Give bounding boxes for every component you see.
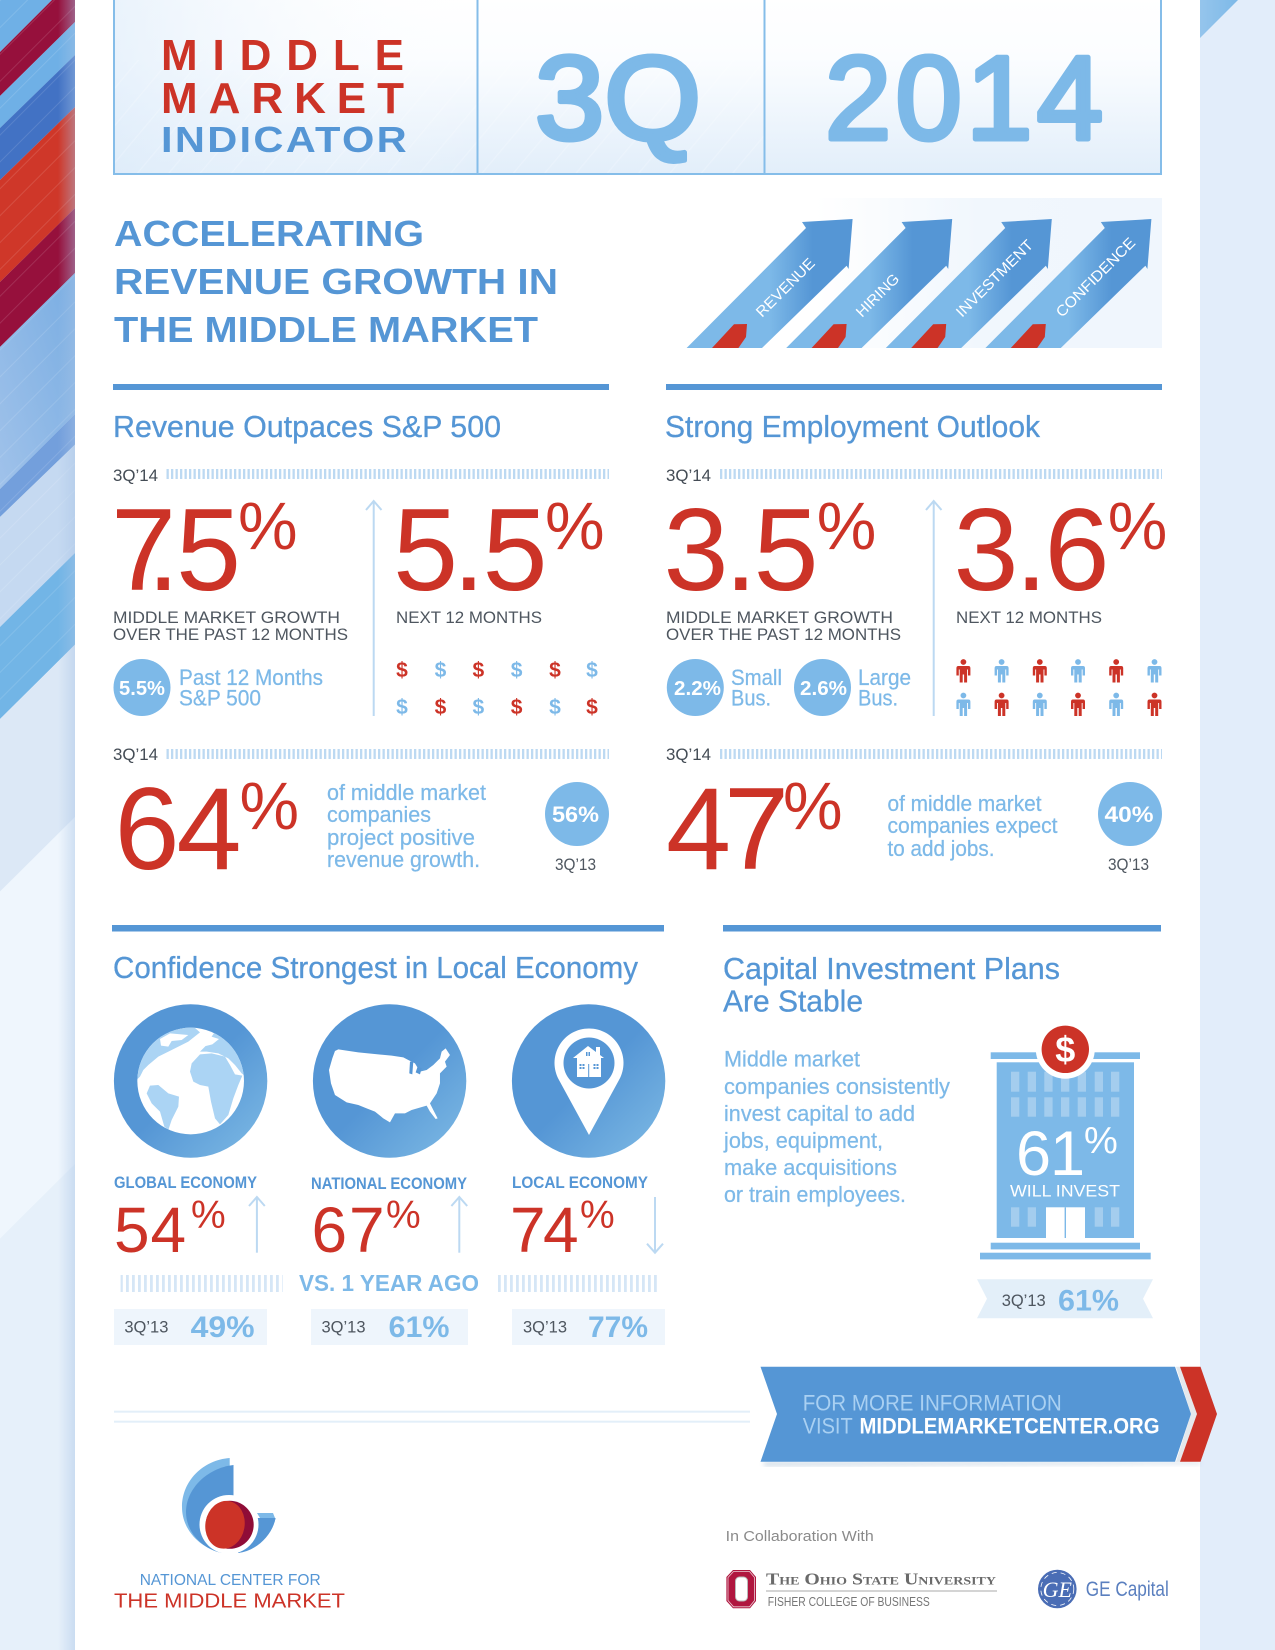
- text: capital investment description: or train employees.: [724, 1182, 906, 1207]
- box: national 3Q13 61%: [311, 1309, 468, 1345]
- box: national 3Q13 61%: 61%: [388, 1311, 450, 1344]
- box: global 3Q13 49%: [114, 1309, 267, 1345]
- heading: employment: Strong Employment Outlook: [665, 409, 1040, 444]
- box: local 3Q13 77%: 3Q’13: [523, 1319, 567, 1337]
- stat: global economy: [114, 1174, 257, 1266]
- year label: 2014: [825, 32, 1103, 165]
- callout: large business 2.6%: [794, 659, 911, 716]
- tick bar: employment 3Q14: [666, 467, 1162, 485]
- stat: 64 percent: [114, 763, 299, 894]
- text: capital investment description: Middle market: [724, 1047, 860, 1072]
- heading: confidence: Confidence Strongest in Local Economy: [113, 950, 638, 985]
- caption: past 12 months: [113, 609, 348, 644]
- icon: building with 61%: WILL INVEST: [1010, 1183, 1120, 1201]
- stat: national economy: 67: [312, 1194, 385, 1266]
- main heading: ACCELERATING: [114, 213, 424, 254]
- arrow: revenue: [687, 219, 853, 348]
- icon: building with 61%: %: [1084, 1120, 1118, 1162]
- ribbon: 3Q13 61%: 3Q’13: [1002, 1292, 1046, 1310]
- stat: 3.6 percent: 3.6: [954, 484, 1110, 615]
- arrow: local down: [647, 1197, 663, 1253]
- icons: dollar signs: $: [473, 696, 485, 719]
- panel: strong employment outlook: [664, 384, 1167, 894]
- title: middle market indicator: MIDDLE: [161, 31, 404, 80]
- stat: 64 percent: 64: [114, 763, 242, 894]
- tick bar: 3Q14 second: 3Q’14: [113, 746, 158, 764]
- arrow: investment: [886, 219, 1052, 348]
- logo: national center for the middle market: [114, 1458, 346, 1612]
- caption: past 12 months: MIDDLE MARKET GROWTH: [113, 609, 340, 627]
- box: local 3Q13 77%: 77%: [588, 1311, 648, 1344]
- panel: confidence strongest in local economy: [112, 925, 665, 1345]
- main heading: THE MIDDLE MARKET: [114, 309, 538, 350]
- stat: national economy: [311, 1175, 467, 1266]
- text: capital investment description: companies consistently: [724, 1074, 950, 1099]
- stat: global economy: %: [191, 1194, 226, 1237]
- ribbon: 3Q13 61%: [977, 1279, 1153, 1318]
- stat: national economy: %: [386, 1194, 421, 1237]
- text: positive revenue growth: of middle market: [327, 780, 486, 805]
- logo: national center for the middle market: THE MIDDLE MARKET: [114, 1589, 346, 1612]
- text: positive revenue growth: [327, 780, 486, 872]
- heading: revenue: Revenue Outpaces S&P 500: [113, 409, 501, 444]
- logo: ohio state university: FISHER COLLEGE OF BUSINESS: [768, 1595, 930, 1609]
- quarter label: 3Q: [535, 32, 701, 165]
- arrow: national up: [451, 1197, 467, 1253]
- tick bar: employment 3Q14 second: 3Q’14: [666, 746, 711, 764]
- box: global 3Q13 49%: 49%: [191, 1311, 255, 1344]
- arrow: revenue: REVENUE: [753, 255, 819, 321]
- main heading: [114, 213, 558, 350]
- box: global 3Q13 49%: 3Q’13: [124, 1319, 168, 1337]
- text: expect to add jobs: [888, 791, 1058, 861]
- banner: more information: MIDDLEMARKETCENTER.ORG: [860, 1413, 1160, 1438]
- stat: 64 percent: %: [240, 769, 299, 844]
- icons: dollar signs: [396, 659, 598, 719]
- arrow: employment up divider: [926, 501, 942, 716]
- right decorative band: [1200, 0, 1275, 1650]
- title: middle market indicator: MARKET: [161, 74, 404, 123]
- heading: capital investment: [723, 951, 1060, 1019]
- callout: large business 2.6%: Bus.: [858, 686, 898, 711]
- stat: 7.5 percent: [111, 484, 298, 615]
- tick bar: employment 3Q14: 3Q’14: [666, 467, 711, 485]
- caption: past 12 months: OVER THE PAST 12 MONTHS: [113, 626, 348, 644]
- icon: united states map: [313, 1004, 466, 1158]
- stat: local economy: 74: [510, 1194, 579, 1266]
- stat: 3.5 percent: %: [817, 489, 876, 564]
- stat: 47 percent: %: [783, 769, 843, 844]
- callout: small business 2.2%: 2.2%: [674, 678, 721, 700]
- caption: next 12 months: NEXT 12 MONTHS: [396, 609, 542, 627]
- logo: GE Capital: GE Capital: [1086, 1578, 1169, 1601]
- stat: 47 percent: [666, 763, 843, 894]
- icon: location pin with house: [512, 1004, 665, 1158]
- callout: small business 2.2%: Bus.: [731, 686, 771, 711]
- text: expect to add jobs: to add jobs.: [888, 836, 994, 861]
- caption: employment past 12 months: [666, 609, 901, 644]
- stat: national economy: NATIONAL ECONOMY: [311, 1175, 467, 1193]
- banner: more information: FOR MORE INFORMATION: [803, 1391, 1062, 1416]
- stat: local economy: %: [580, 1194, 615, 1237]
- arrow: investment: INVESTMENT: [953, 237, 1037, 321]
- text: positive revenue growth: companies: [327, 802, 431, 827]
- banner: more information: VISIT: [803, 1413, 853, 1438]
- stat: global economy: 54: [114, 1194, 186, 1266]
- icon: building with 61%: $: [1055, 1029, 1075, 1070]
- callout: large business 2.6%: Large: [858, 665, 911, 690]
- arrow: confidence: [985, 219, 1151, 348]
- stat: 3.6 percent: %: [1108, 489, 1167, 564]
- heading: capital investment: Capital Investment Plans: [723, 951, 1060, 986]
- callout: S&P 500 5.5%: [114, 659, 323, 716]
- arrow: hiring: [786, 219, 952, 348]
- logo: national center for the middle market: NATIONAL CENTER FOR: [140, 1572, 321, 1589]
- stat: 47 percent: 47: [666, 763, 789, 894]
- stat: 7.5 percent: 7.5: [111, 484, 241, 615]
- title: middle market indicator: INDICATOR: [161, 119, 409, 160]
- stat: local economy: [510, 1174, 648, 1266]
- callout: 56% 3Q13: [545, 782, 609, 874]
- box: national 3Q13 61%: 3Q’13: [322, 1319, 366, 1337]
- ribbon: 3Q13 61%: 61%: [1058, 1285, 1119, 1318]
- logo: ohio state university: The Ohio State University: [766, 1569, 996, 1588]
- callout: 40% 3Q13: [1098, 782, 1162, 874]
- icons: dollar signs: $: [549, 696, 561, 719]
- icons: dollar signs: $: [396, 696, 408, 719]
- stat: global economy: GLOBAL ECONOMY: [114, 1174, 257, 1192]
- icons: dollar signs: $: [511, 696, 523, 719]
- logo: GE Capital: GE: [1043, 1577, 1073, 1602]
- text: capital investment description: invest capital to add: [724, 1101, 915, 1126]
- text: capital investment description: jobs, equipment,: [723, 1128, 883, 1153]
- icons: people: [956, 659, 1162, 716]
- arrow: confidence: CONFIDENCE: [1053, 235, 1139, 321]
- caption: employment past 12 months: OVER THE PAST 12 MONTHS: [666, 626, 901, 644]
- caption: employment past 12 months: MIDDLE MARKET GROWTH: [666, 609, 893, 627]
- icons: dollar signs: $: [435, 659, 447, 682]
- caption: employment next 12 months: NEXT 12 MONTHS: [956, 609, 1102, 627]
- logo: GE Capital: [1038, 1570, 1169, 1608]
- callout: S&P 500 5.5%: Past 12 Months: [179, 665, 323, 690]
- text: expect to add jobs: companies expect: [888, 813, 1058, 838]
- title: middle market indicator: [161, 31, 409, 160]
- logo: ohio state university: [726, 1569, 997, 1609]
- tick bar: employment 3Q14 second: [666, 746, 1162, 764]
- header panel: [114, 0, 1161, 174]
- heading: capital investment: Are Stable: [723, 984, 863, 1019]
- callout: 56% 3Q13: 3Q’13: [555, 856, 596, 874]
- arrow: up divider: [366, 501, 382, 716]
- banner: more information: [760, 1367, 1217, 1466]
- panel: revenue outpaces S&P 500: [111, 384, 609, 894]
- text: capital investment description: [723, 1047, 950, 1207]
- callout: small business 2.2%: [667, 659, 782, 716]
- callout: S&P 500 5.5%: S&P 500: [179, 686, 261, 711]
- stat: 3.5 percent: 3.5: [664, 484, 819, 615]
- stat: 7.5 percent: %: [238, 489, 298, 564]
- callout: large business 2.6%: 2.6%: [800, 678, 847, 700]
- icons: dollar signs: $: [511, 659, 523, 682]
- footer divider lines: [114, 1411, 750, 1423]
- arrow: global up: [249, 1197, 265, 1253]
- tick bar: 3Q14: [113, 467, 609, 485]
- arrow: hiring: HIRING: [853, 271, 903, 321]
- text: expect to add jobs: of middle market: [888, 791, 1042, 816]
- growth arrows graphic: [687, 198, 1162, 348]
- callout: S&P 500 5.5%: 5.5%: [119, 678, 165, 700]
- main heading: REVENUE GROWTH IN: [114, 261, 558, 302]
- icon: globe: [114, 1004, 267, 1158]
- callout: small business 2.2%: Small: [731, 665, 782, 690]
- box: local 3Q13 77%: [512, 1309, 665, 1345]
- icons: dollar signs: $: [473, 659, 485, 682]
- icons: dollar signs: $: [586, 659, 598, 682]
- callout: 40% 3Q13: 40%: [1104, 802, 1154, 827]
- callout: 56% 3Q13: 56%: [552, 802, 599, 827]
- text: in collaboration with: In Collaboration With: [726, 1529, 874, 1545]
- text: positive revenue growth: project positive: [327, 825, 475, 850]
- icons: dollar signs: $: [549, 659, 561, 682]
- tick bar: 3Q14 second: [113, 746, 609, 764]
- text: positive revenue growth: revenue growth.: [327, 847, 480, 872]
- icons: dollar signs: $: [435, 696, 447, 719]
- icons: dollar signs: $: [396, 659, 408, 682]
- icons: dollar signs: $: [586, 696, 598, 719]
- stat: local economy: LOCAL ECONOMY: [512, 1174, 648, 1192]
- icon: building with 61%: 61: [1016, 1119, 1085, 1189]
- text: capital investment description: make acquisitions: [724, 1155, 897, 1180]
- left decorative band: [0, 0, 75, 1650]
- callout: 40% 3Q13: 3Q’13: [1108, 856, 1149, 874]
- label: vs 1 year ago: [121, 1270, 658, 1296]
- stat: 5.5 percent: 5.5: [393, 484, 548, 615]
- stat: 5.5 percent: %: [545, 489, 605, 564]
- panel: capital investment plans: [723, 925, 1161, 1318]
- icon: building with 61%: [980, 1020, 1151, 1259]
- tick bar: 3Q14: 3Q’14: [113, 467, 158, 485]
- label: vs 1 year ago: VS. 1 YEAR AGO: [299, 1270, 479, 1296]
